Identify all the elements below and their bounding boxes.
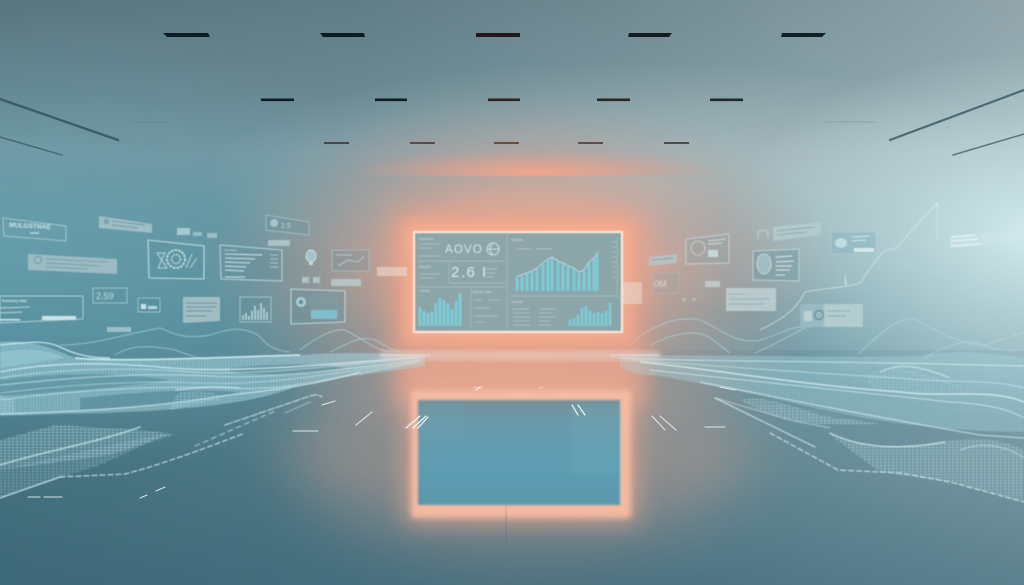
background wave ridges [60, 318, 1024, 360]
small labels: Activity [512, 300, 523, 304]
panel: small glyph card [93, 288, 127, 303]
dashboard dividers [418, 234, 620, 330]
floating panels: right wall [622, 203, 1018, 330]
panel: portrait card [753, 249, 799, 281]
main dashboard panel [414, 232, 622, 332]
small tags [107, 228, 407, 332]
lower mesh: left [0, 391, 322, 498]
panel: note card middle [28, 254, 117, 274]
panel: brain diagram [148, 240, 204, 279]
main wave band: left [0, 342, 425, 416]
small labels [419, 237, 523, 304]
ceiling light slots [163, 33, 826, 144]
panel: small glyph card: 2.59 [96, 291, 114, 301]
panel: note card top [99, 216, 152, 233]
line chart with rising arrow [760, 203, 940, 330]
reflection of dashboard on floor [404, 384, 638, 548]
small labels: Trends [419, 289, 430, 293]
icon: light bulb [306, 250, 316, 265]
floor tick marks [28, 387, 735, 498]
icon: small house [758, 230, 768, 238]
main wave band: right [620, 352, 1024, 438]
panel: form: Summary data [2, 299, 28, 303]
panel: text tile [726, 288, 776, 311]
central glow halo [392, 212, 644, 352]
dashboard heading: AOVO [445, 244, 483, 256]
panel: chart outline [332, 250, 369, 271]
panel: face profile card [686, 234, 729, 264]
small labels: Results [419, 265, 431, 269]
floating panels: left wall [0, 215, 407, 332]
panel: glyph thumbnail: 0M [654, 279, 667, 289]
panel: teal stats card [291, 289, 345, 324]
panel: mini bar chart [240, 297, 271, 322]
horizon glow over waves [380, 351, 660, 360]
panel: text strip [950, 231, 1018, 248]
panel: wide note [773, 222, 821, 241]
panel: hub card [266, 215, 309, 235]
panel: title card: MULGSTNAE [9, 222, 52, 231]
big number: 2.6 I [451, 264, 488, 281]
panel: teal chart card [831, 232, 876, 254]
chart: lower right bars [570, 303, 610, 326]
panel: lock and ring card [800, 304, 863, 327]
panel: hub card: 2.5 [281, 223, 291, 230]
small labels: Insights [511, 238, 523, 242]
panel: tiny thumbnail [138, 298, 160, 312]
small labels: Signals data [472, 290, 491, 294]
chart: lower left bars [420, 293, 460, 326]
panel: text tile [183, 297, 220, 323]
panel: small tile [649, 254, 677, 266]
lower mesh: right [715, 398, 1024, 502]
dashboard frame [414, 232, 622, 332]
ceiling side rails [0, 90, 1024, 155]
chart: main area bars [516, 252, 598, 291]
placeholder text lines [419, 242, 616, 325]
panel: glyph thumbnail [653, 273, 679, 293]
panel: title card [3, 218, 66, 241]
icon: dashboard globe [487, 243, 499, 255]
small tags [622, 281, 720, 304]
panel: list: Overview [224, 248, 237, 252]
panel: list [220, 245, 282, 281]
panel: form [0, 296, 83, 323]
small labels: Overview [419, 237, 434, 241]
